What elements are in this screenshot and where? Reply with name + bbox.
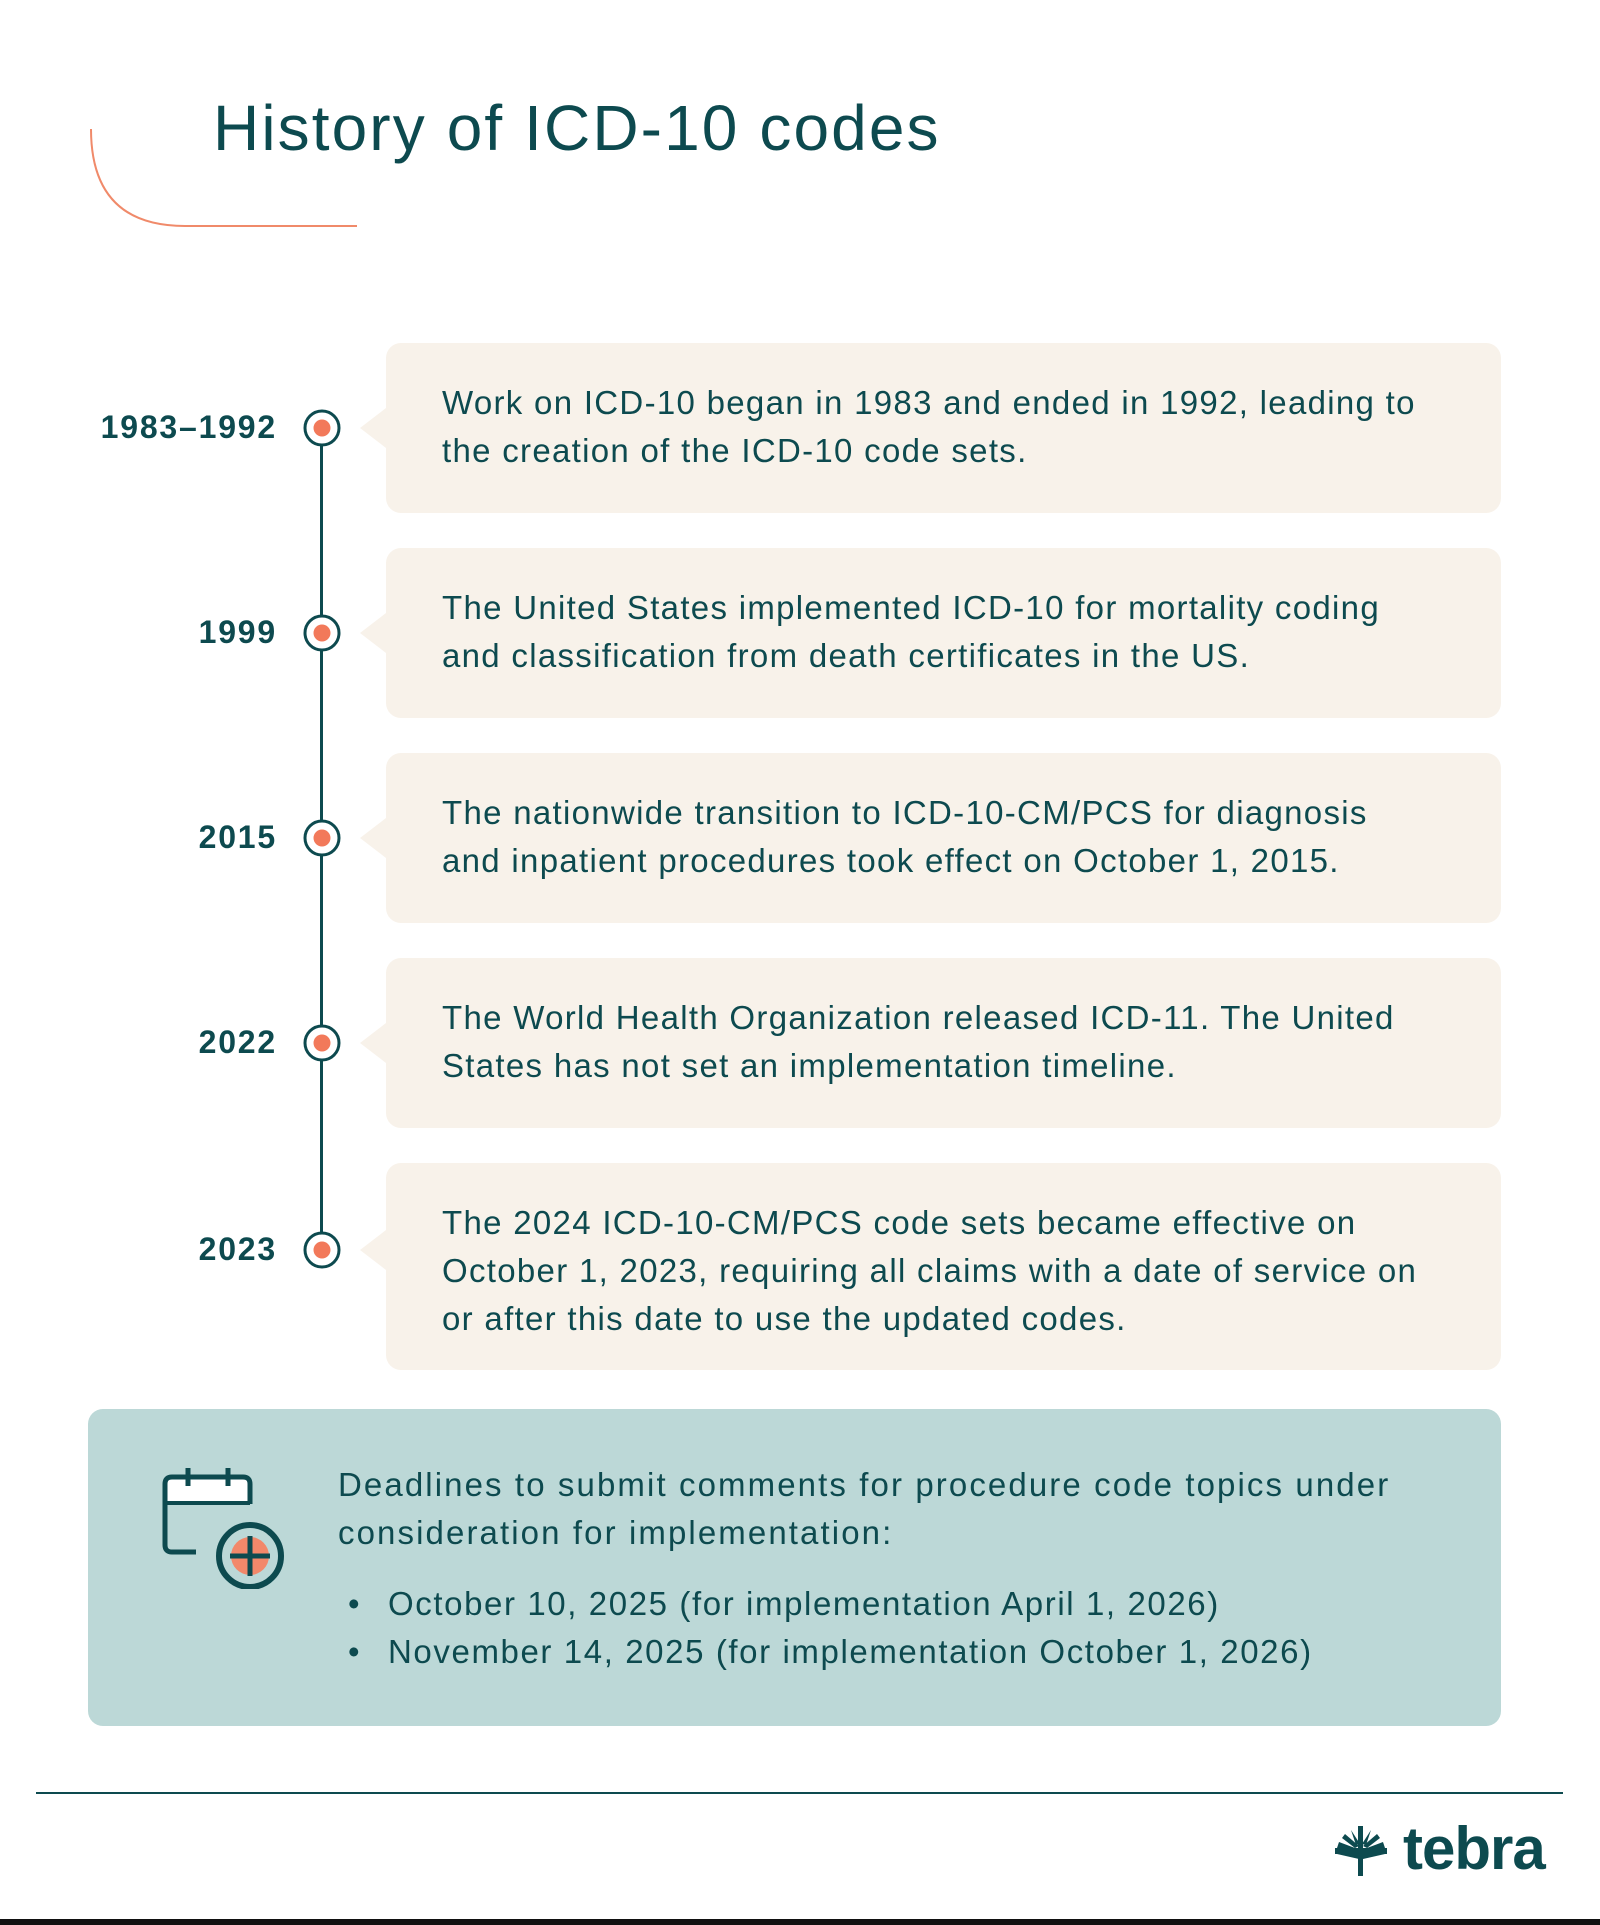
wordmark: tebra: [1403, 1815, 1545, 1882]
marker: [304, 410, 340, 446]
card: [386, 958, 1501, 1128]
timeline item 2: [199, 548, 1501, 718]
marker: [304, 820, 340, 856]
card: and classification from death certificates in the US.: [442, 637, 1250, 674]
card: and inpatient procedures took effect on October 1, 2015.: [442, 842, 1340, 879]
timeline item 4: [199, 958, 1501, 1128]
list: deadlines: [348, 1585, 1313, 1670]
card: the creation of the ICD-10 code sets.: [442, 432, 1028, 469]
card: [386, 343, 1501, 513]
bottom bar: [0, 1919, 1600, 1925]
marker: [304, 614, 340, 652]
card: [386, 1163, 1501, 1370]
marker: [304, 1024, 340, 1062]
list: deadlines: •: [348, 1585, 361, 1622]
card: The World Health Organization released ICD-11. The United: [442, 999, 1395, 1036]
card: Work on ICD-10 began in 1983 and ended in 1992, leading to: [442, 384, 1416, 421]
divider: [36, 1792, 1563, 1794]
icon: logo mark: [1335, 1826, 1387, 1876]
card: The United States implemented ICD-10 for mortality coding: [442, 589, 1380, 626]
text: deadlines intro: [338, 1466, 1390, 1551]
card: or after this date to use the updated codes.: [442, 1300, 1127, 1337]
year: 2023: [199, 1231, 277, 1267]
year: 2022: [199, 1024, 277, 1060]
card: [386, 753, 1501, 923]
icon: calendar plus: [162, 1468, 284, 1589]
logo: tebra: [1335, 1815, 1546, 1882]
timeline line: [320, 428, 323, 1248]
timeline item 5: [199, 1163, 1501, 1370]
card: The 2024 ICD-10-CM/PCS code sets became effective on: [442, 1204, 1356, 1241]
text: deadlines intro: consideration for implementation:: [338, 1514, 893, 1551]
list: deadlines: October 10, 2025 (for implementation April 1, 2026): [388, 1585, 1220, 1622]
timeline item 1: [101, 343, 1501, 513]
year: 1983–1992: [101, 409, 277, 445]
list: deadlines: November 14, 2025 (for implementation October 1, 2026): [388, 1633, 1313, 1670]
card: The nationwide transition to ICD-10-CM/PCS for diagnosis: [442, 794, 1368, 831]
timeline item 3: [199, 753, 1501, 923]
decorative arc: [90, 129, 357, 227]
card: States has not set an implementation timeline.: [442, 1047, 1177, 1084]
list: deadlines: •: [348, 1633, 361, 1670]
card: October 1, 2023, requiring all claims with a date of service on: [442, 1252, 1417, 1289]
card: [386, 548, 1501, 718]
marker: [304, 1232, 340, 1268]
text: deadlines intro: Deadlines to submit comments for procedure code topics under: [338, 1466, 1390, 1503]
title: History of ICD-10 codes: [213, 92, 941, 164]
year: 2015: [199, 819, 277, 855]
panel: deadlines: [88, 1409, 1501, 1726]
year: 1999: [199, 614, 277, 650]
